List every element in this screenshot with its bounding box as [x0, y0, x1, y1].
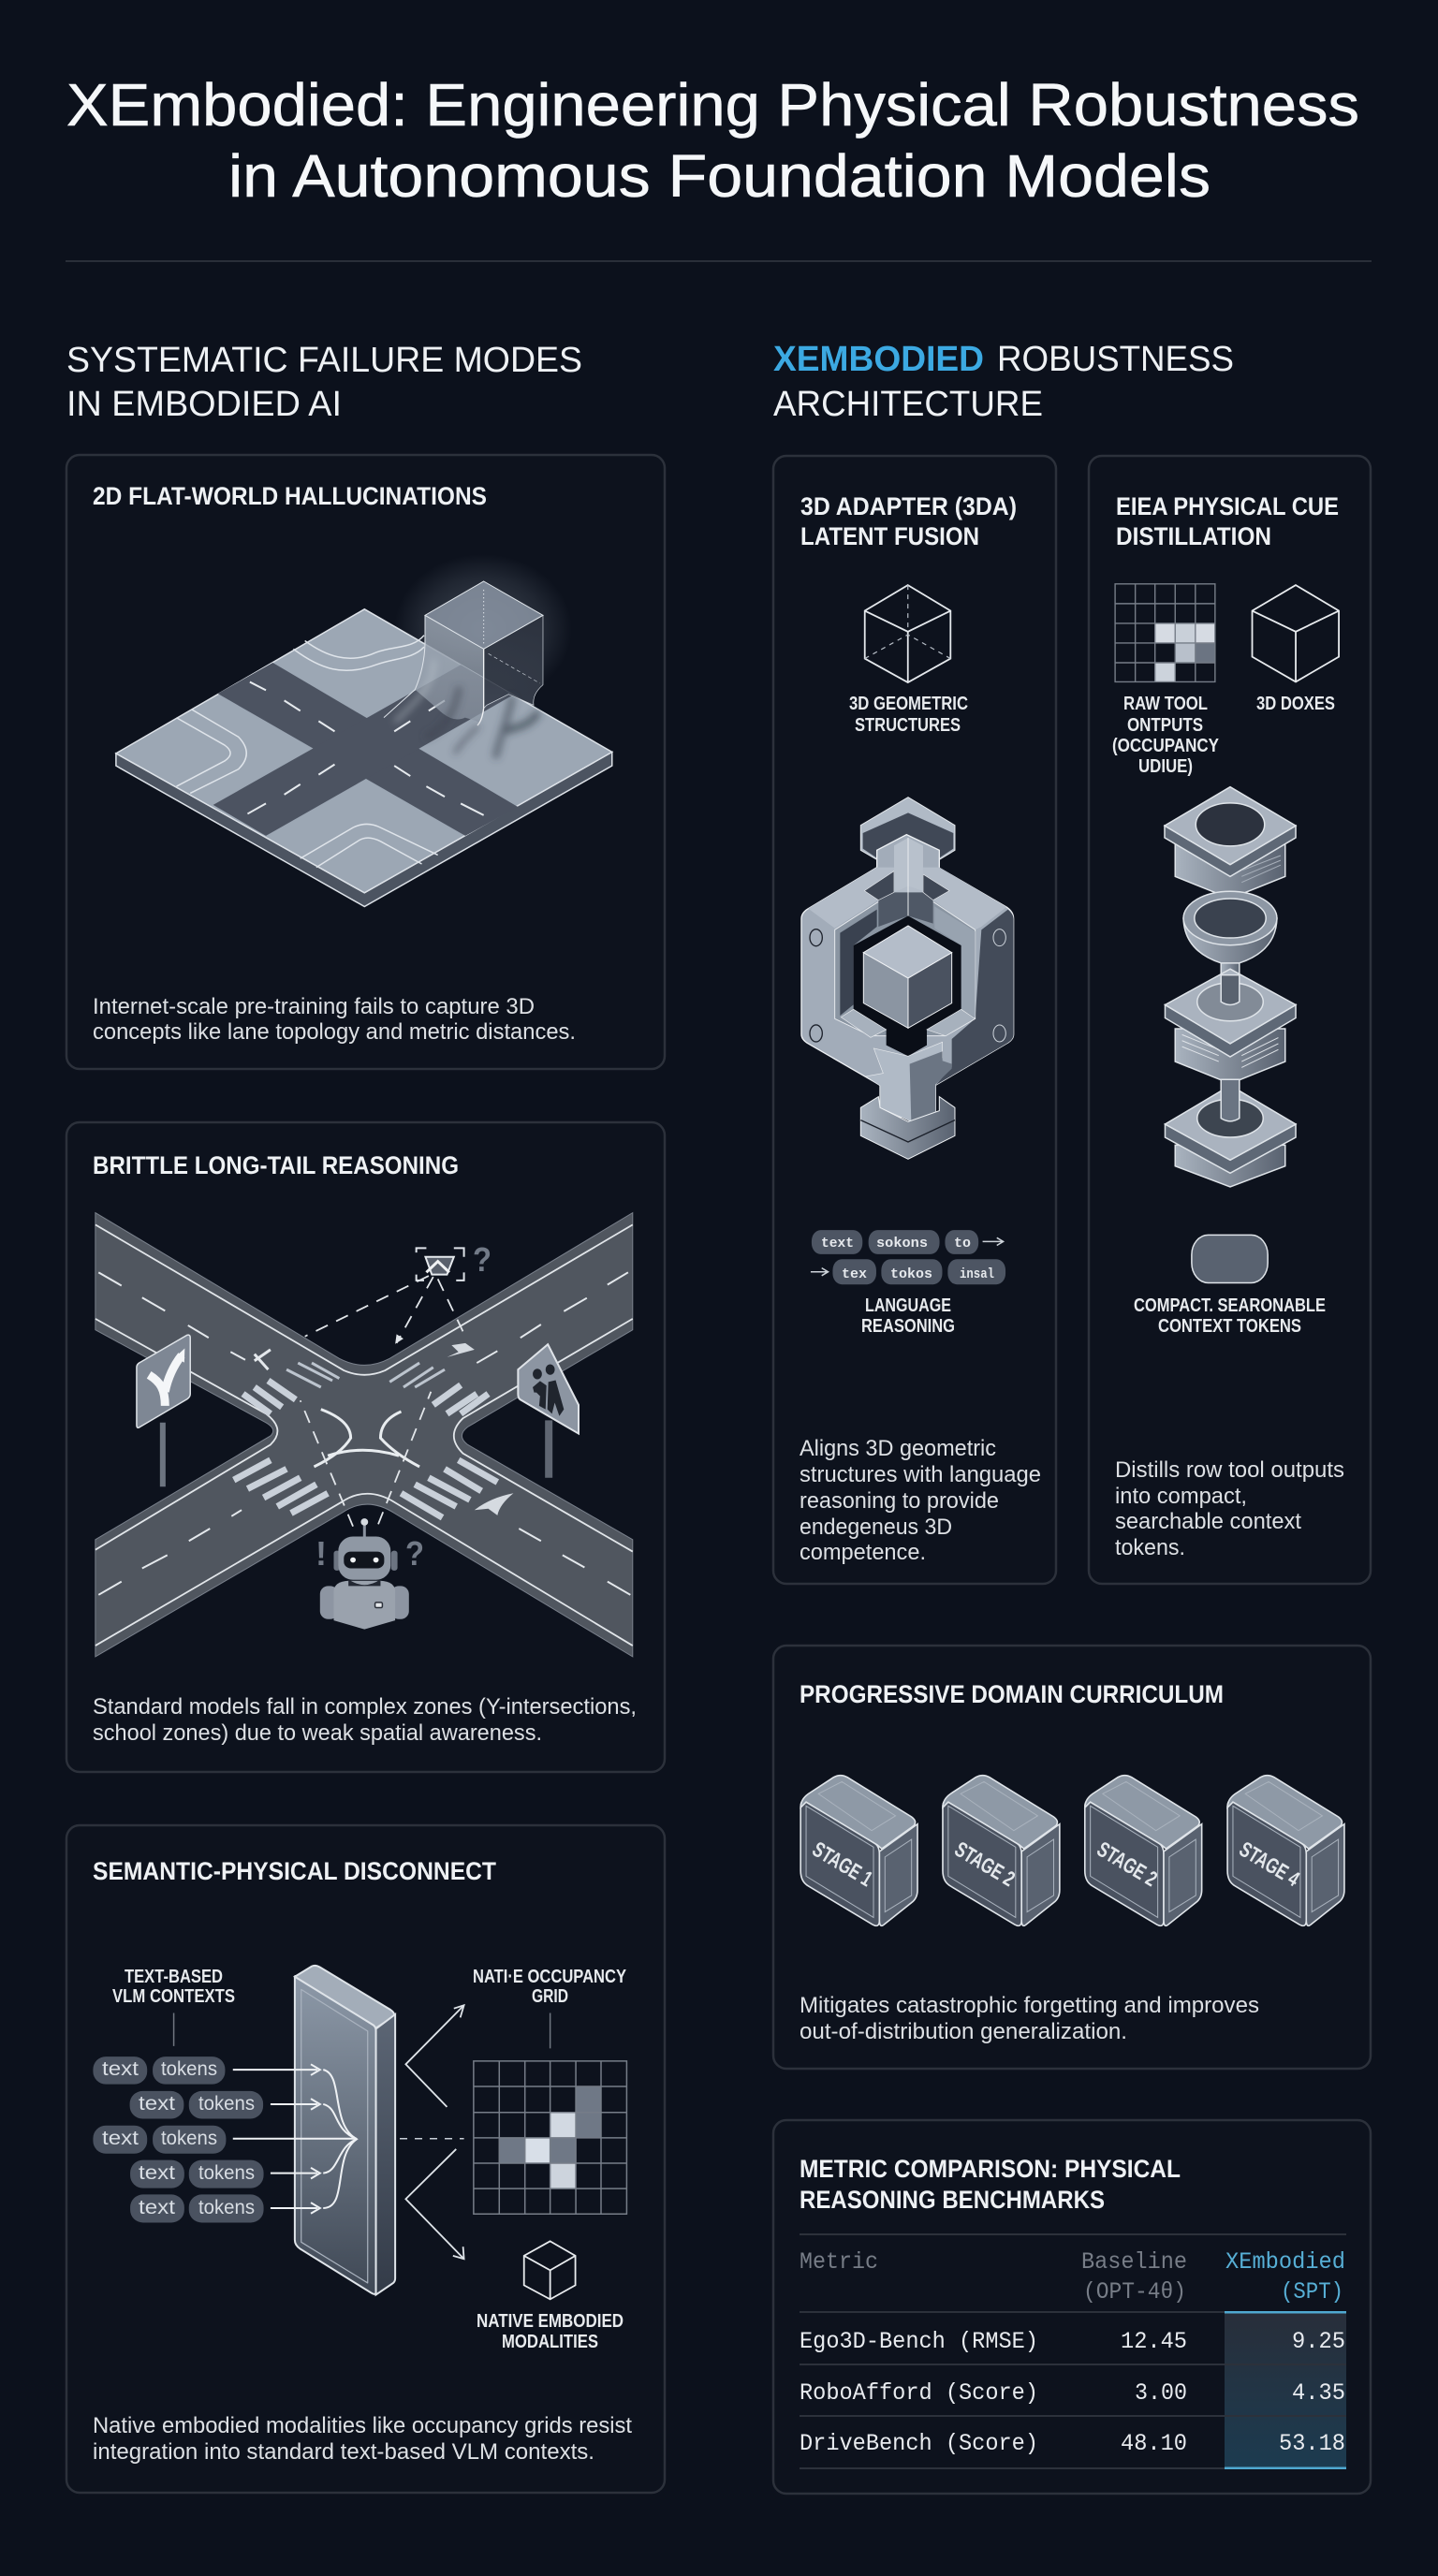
description: school zones) due to weak spatial awareness.: [93, 1720, 542, 1746]
row: Ego3D-Bench: [800, 2328, 1345, 2355]
stage box 3: [1085, 1776, 1202, 1925]
heading: [800, 2155, 1181, 2214]
panel: semantic-physical disconnect: [66, 1825, 665, 2493]
raw occupancy grid: [1115, 584, 1215, 681]
description: Native embodied modalities like occupancy grids resist: [93, 2413, 632, 2438]
description: [93, 1694, 637, 1746]
description: Internet-scale pre-training fails to capture 3D: [93, 994, 535, 1019]
description: searchable context: [1115, 1509, 1301, 1534]
icon: context token: [1192, 1235, 1268, 1282]
description: [800, 1436, 1041, 1565]
heading: METRIC COMPARISON: PHYSICAL: [800, 2155, 1181, 2183]
pill labels: [102, 2058, 255, 2218]
heading: systematic failure modes: IN EMBODIED AI: [66, 385, 342, 424]
illustration: complex intersection: ?: [473, 1240, 492, 1279]
description: endegeneus 3D: [800, 1515, 952, 1540]
heading: [800, 492, 1017, 550]
row: DriveBench: 53.18: [1279, 2430, 1345, 2457]
row: Ego3D-Bench: 9.25: [1292, 2328, 1345, 2355]
stage box 1: [800, 1776, 917, 1925]
icon: wire cube: [524, 2241, 576, 2299]
heading: xembodied robustness architecture: [773, 340, 1234, 424]
panel: 2D flat-world hallucinations: [66, 455, 665, 1069]
label: raw tool outputs: (OCCUPANCY: [1112, 736, 1220, 756]
label: raw tool outputs: RAW TOOL: [1123, 694, 1208, 714]
token pills: language reasoning: [811, 1230, 1005, 1284]
stage boxes: [800, 1776, 1344, 1925]
label: text-based VLM contexts: VLM CONTEXTS: [112, 1986, 235, 2007]
description: structures with language: [800, 1462, 1041, 1487]
label: native embodied modalities: [477, 2311, 624, 2352]
description: Distills row tool outputs: [1115, 1457, 1344, 1483]
description: [93, 994, 576, 1045]
heading: DISTILLATION: [1116, 522, 1271, 550]
label: language reasoning: LANGUAGE: [865, 1295, 951, 1316]
token pills: language reasoning: to: [954, 1236, 971, 1251]
pill labels: text: [102, 2058, 139, 2080]
icon: 3D box: [1253, 585, 1339, 681]
label: native embodied modalities: NATIVE EMBODIED: [477, 2311, 624, 2332]
illustration: complex intersection: [95, 1213, 633, 1657]
icon: pedestrian sign: [518, 1344, 579, 1478]
heading: LATENT FUSION: [800, 522, 979, 550]
row: DriveBench: 48.10: [1121, 2430, 1187, 2457]
illustration: funnel stack: [1165, 787, 1296, 1187]
row: RoboAfford: 3.00: [1135, 2379, 1187, 2407]
row: RoboAfford: [800, 2379, 1345, 2407]
description: into compact,: [1115, 1484, 1247, 1509]
description: out-of-distribution generalization.: [800, 2019, 1127, 2044]
description: [1115, 1457, 1344, 1560]
heading: BRITTLE LONG-TAIL REASONING: [93, 1151, 459, 1179]
description: Standard models fall in complex zones (Y-intersections,: [93, 1694, 637, 1720]
pill labels: tokens: [161, 2058, 217, 2080]
stage boxes: STAGE 2: [1093, 1837, 1162, 1891]
label: native occupancy grid: NATI·E OCCUPANCY: [473, 1967, 627, 1987]
occupancy grid: [474, 2061, 626, 2214]
description: Mitigates catastrophic forgetting and improves: [800, 1993, 1259, 2018]
table header: (OPT-4θ): [1083, 2278, 1186, 2305]
heading: systematic failure modes: [66, 341, 582, 424]
diagram: tokens into slab versus occupancy grid: [93, 1966, 627, 2352]
label: 3D geometric structures: STRUCTURES: [855, 715, 961, 736]
unit 1: [1165, 787, 1296, 899]
label: compact searchable context tokens: CONTEXT TOKENS: [1158, 1316, 1301, 1337]
heading: systematic failure modes: SYSTEMATIC FAILURE MODES: [66, 341, 582, 380]
description: competence.: [800, 1540, 926, 1565]
heading: EIEA PHYSICAL CUE: [1116, 492, 1339, 520]
pill labels: tokens: [198, 2093, 255, 2115]
pills: [93, 2056, 264, 2222]
pill labels: text: [102, 2128, 139, 2149]
row: Ego3D-Bench: Ego3D-Bench (RMSE): [800, 2328, 1038, 2355]
description: tokens.: [1115, 1535, 1185, 1560]
token pills: language reasoning: text: [821, 1236, 854, 1251]
label: raw tool outputs: [1112, 694, 1220, 777]
label: raw tool outputs: UDIUE): [1138, 756, 1193, 777]
label: native occupancy grid: GRID: [532, 1986, 568, 2007]
table header: XEmbodied: [1225, 2248, 1345, 2276]
table header: Metric: [800, 2248, 878, 2276]
description: integration into standard text-based VLM contexts.: [93, 2439, 594, 2465]
description: [93, 2413, 632, 2465]
slab: [295, 1966, 395, 2295]
illustration: hexagonal 3D adapter: [801, 798, 1014, 1159]
unit 2: [1165, 969, 1296, 1121]
title: in Autonomous Foundation Models: [228, 142, 1211, 210]
label: text-based VLM contexts: TEXT-BASED: [125, 1967, 223, 1987]
heading: [1116, 492, 1339, 550]
panel: EIEA physical cue distillation: [1089, 456, 1371, 1584]
highlighted XEmbodied column: [1225, 2312, 1346, 2468]
row: RoboAfford: 4.35: [1292, 2379, 1345, 2407]
funnel: [1183, 891, 1277, 1011]
icon: robot: [320, 1518, 409, 1630]
label: native embodied modalities: MODALITIES: [502, 2332, 598, 2352]
icon: fork sign: [137, 1335, 190, 1486]
icon: camera: [417, 1248, 464, 1281]
token pills: language reasoning: tokos: [890, 1266, 932, 1282]
description: [800, 1993, 1259, 2044]
title: XEmbodied: Engineering Physical Robustness: [66, 71, 1359, 139]
panel: progressive domain curriculum: [773, 1646, 1371, 2069]
label: compact searchable context tokens: [1134, 1295, 1326, 1337]
heading: PROGRESSIVE DOMAIN CURRICULUM: [800, 1680, 1224, 1708]
label: 3D geometric structures: 3D GEOMETRIC: [849, 694, 968, 714]
table header: [800, 2248, 1345, 2305]
pill labels: tokens: [198, 2197, 255, 2218]
panel: metric comparison table: [773, 2120, 1371, 2494]
illustration: complex intersection: !: [315, 1534, 327, 1573]
stage box 4: [1227, 1776, 1344, 1925]
row: Ego3D-Bench: 12.45: [1121, 2328, 1187, 2355]
illustration: isometric road plate with melting cube: [116, 554, 612, 906]
panel: brittle long-tail reasoning: [66, 1122, 665, 1772]
pill labels: text: [139, 2093, 175, 2115]
title: [66, 71, 1359, 210]
label: text-based VLM contexts: [112, 1967, 235, 2007]
heading: SEMANTIC-PHYSICAL DISCONNECT: [93, 1857, 496, 1885]
label: native occupancy grid: [473, 1967, 627, 2007]
row: DriveBench: DriveBench (Score): [800, 2430, 1038, 2457]
token pills: language reasoning: tex: [842, 1266, 867, 1282]
table header: (SPT): [1281, 2278, 1343, 2305]
label: 3D geometric structures: [849, 694, 968, 736]
description: Aligns 3D geometric: [800, 1436, 996, 1461]
stage boxes: STAGE 1: [808, 1837, 877, 1891]
unit 3: [1165, 1079, 1296, 1187]
heading: xembodied robustness architecture: ARCHITECTURE: [773, 385, 1043, 424]
row: DriveBench: [800, 2430, 1345, 2457]
stage boxes: STAGE 2: [950, 1837, 1020, 1891]
pill labels: tokens: [161, 2128, 217, 2149]
heading: 2D FLAT-WORLD HALLUCINATIONS: [93, 482, 487, 510]
table header: Baseline: [1081, 2248, 1187, 2276]
label: 3D doxes: 3D DOXES: [1256, 694, 1335, 714]
heading: REASONING BENCHMARKS: [800, 2186, 1105, 2214]
label: raw tool outputs: ONTPUTS: [1127, 715, 1203, 736]
description: concepts like lane topology and metric distances.: [93, 1019, 576, 1045]
illustration: complex intersection: ?: [405, 1534, 424, 1573]
token pills: language reasoning: sokons: [876, 1236, 928, 1251]
label: language reasoning: [861, 1295, 955, 1337]
heading: xembodied robustness architecture: XEMBODIED: [773, 340, 984, 379]
description: reasoning to provide: [800, 1488, 999, 1514]
token pills: language reasoning: insal: [960, 1266, 994, 1282]
row: RoboAfford: RoboAfford (Score): [800, 2379, 1038, 2407]
panel: 3D adapter latent fusion: [773, 456, 1056, 1584]
stage boxes: STAGE 4: [1235, 1837, 1304, 1891]
heading: 3D ADAPTER (3DA): [800, 492, 1017, 520]
label: language reasoning: REASONING: [861, 1316, 955, 1337]
heading: xembodied robustness architecture: ROBUSTNESS: [997, 340, 1234, 379]
pill labels: tokens: [198, 2162, 255, 2184]
label: compact searchable context tokens: COMPACT. SEARONABLE: [1134, 1295, 1326, 1316]
pill labels: text: [139, 2197, 175, 2218]
icon: wireframe cube: [865, 585, 950, 682]
pill labels: text: [139, 2162, 175, 2184]
stage box 2: [943, 1776, 1060, 1925]
